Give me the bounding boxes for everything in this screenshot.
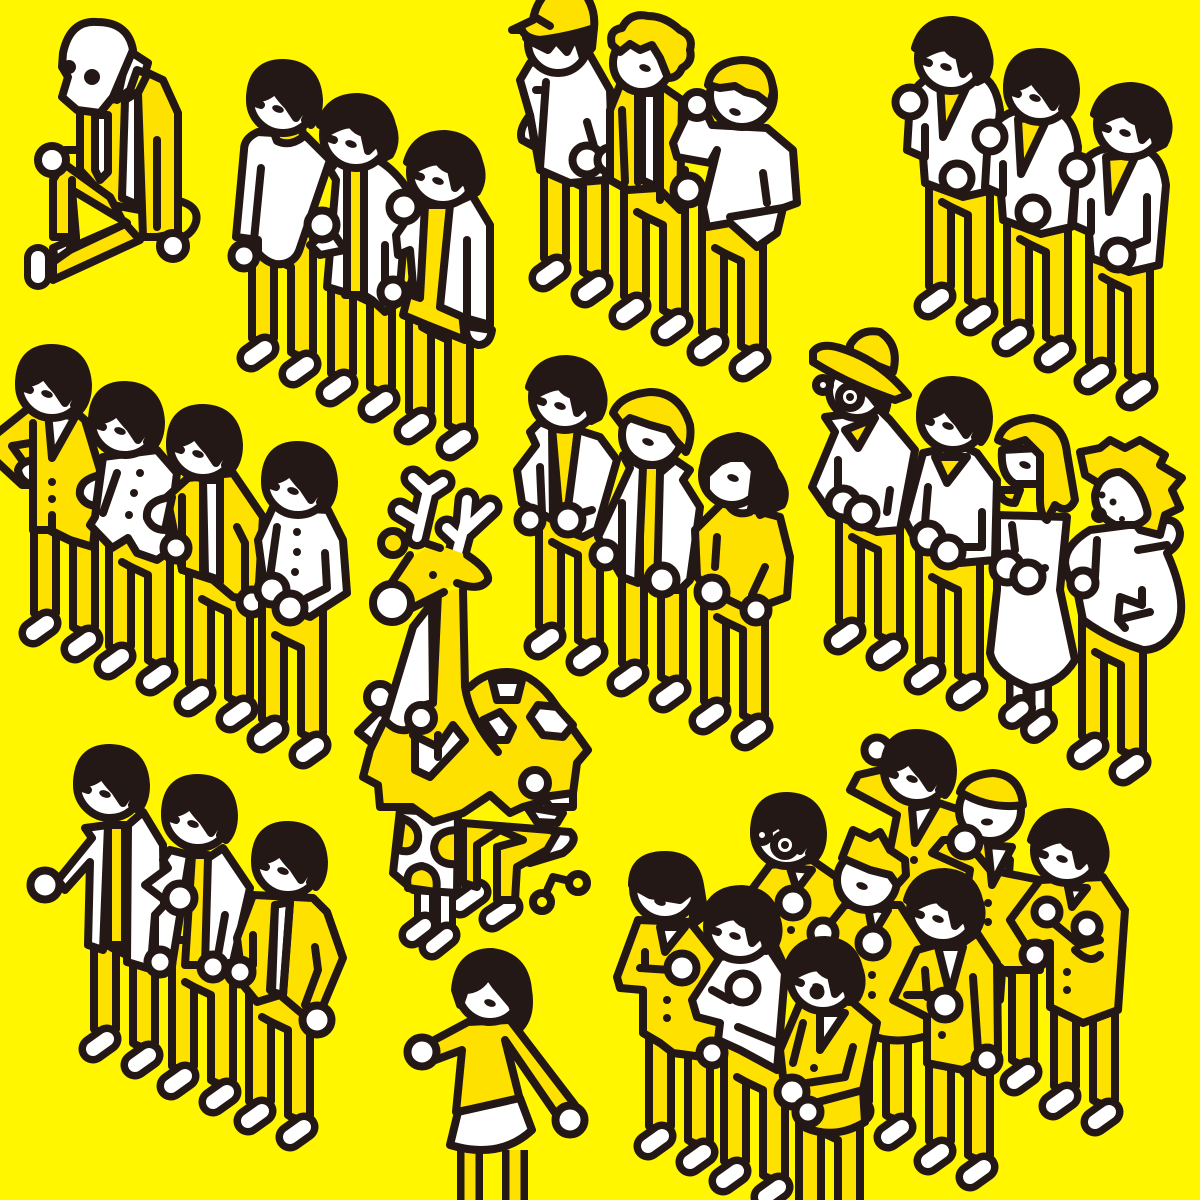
person: curly hair <box>610 15 691 332</box>
neck and head <box>420 588 498 770</box>
person: yellow, white stripe <box>893 872 1000 1177</box>
person: yellow suit <box>0 348 100 649</box>
arms and top <box>425 1020 575 1120</box>
group: seated skeleton figure <box>38 22 197 280</box>
person: white sweater <box>232 63 330 374</box>
person: yellow jacket <box>228 825 343 1137</box>
group: three figures, bottom left <box>30 748 343 1137</box>
shell cape <box>363 672 588 822</box>
person: glasses <box>750 796 855 1000</box>
person <box>1062 86 1169 397</box>
person: long-haired girl in white dress <box>990 418 1075 730</box>
group: three figures, top centre <box>512 0 797 368</box>
group: single girl, bottom centre <box>408 952 584 1200</box>
group: three figures, upper left <box>232 63 492 447</box>
spotted front legs <box>425 890 445 925</box>
person: yellow fringe <box>592 392 700 699</box>
group: crowd, bottom right <box>617 733 1125 1200</box>
person: white shirt <box>905 380 997 697</box>
person: white jacket with yellow scarf <box>390 134 492 447</box>
group: four figures, right middle <box>812 331 1182 772</box>
person: white jacket <box>308 97 408 409</box>
person: arms crossed <box>1010 812 1125 1122</box>
person <box>896 20 1000 322</box>
group: giraffe with shell <box>358 478 588 947</box>
person: arm out <box>30 748 165 1065</box>
tail and hind legs <box>520 830 574 863</box>
skull <box>62 22 133 113</box>
person: yellow sweater, dark wavy hair <box>695 436 790 737</box>
person: buttons, clasped hands <box>258 445 347 755</box>
person: cap <box>932 773 1040 1082</box>
left hand <box>358 712 395 748</box>
person: open mouth, front <box>778 940 877 1200</box>
group: three figures, centre <box>517 359 790 737</box>
antlers <box>400 478 490 553</box>
person: white sleeves <box>692 889 785 1197</box>
person: long hair, yellow suit <box>617 855 735 1162</box>
right hand and sleeves <box>543 793 573 807</box>
person: yellow cap <box>512 0 622 294</box>
hands <box>408 1038 436 1066</box>
person: blond, hand on head <box>673 60 797 368</box>
person: crown <box>810 830 935 1137</box>
person <box>976 52 1078 359</box>
group: three figures, top right <box>896 20 1169 397</box>
person: raised arm, back <box>850 733 1010 1000</box>
person: buttons <box>80 385 177 682</box>
arm <box>413 725 465 777</box>
person: hands clasped <box>145 778 250 1102</box>
person: yellow jacket <box>147 408 264 719</box>
group: four figures, left middle <box>0 348 347 755</box>
person: hat and glasses <box>812 331 915 657</box>
bob hair <box>458 958 522 1022</box>
person: white jacket <box>517 359 617 662</box>
skirt <box>450 1098 532 1150</box>
person: sun-haired figure in coat <box>1065 440 1182 772</box>
